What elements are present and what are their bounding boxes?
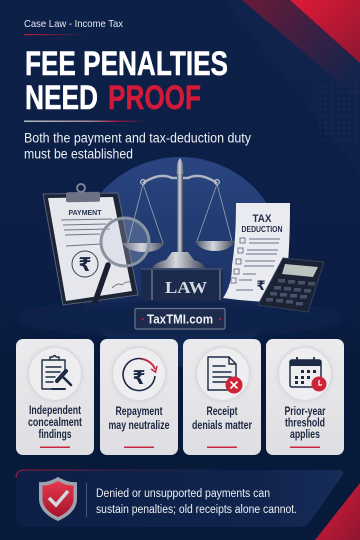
icon: calendar with clock xyxy=(290,357,326,392)
card: receipt denials matter: Receipt xyxy=(206,404,238,418)
card: receipt denials matter xyxy=(183,339,261,455)
icon: document with cross xyxy=(208,357,242,394)
title xyxy=(25,45,228,117)
callout text xyxy=(96,488,297,516)
card: prior-year threshold applies: threshold xyxy=(285,416,325,430)
card: repayment may neutralize: may neutralize xyxy=(108,418,170,432)
calculator xyxy=(258,258,324,312)
scales of justice xyxy=(122,158,235,268)
icon: clipboard and gavel xyxy=(42,356,71,389)
eyebrow label xyxy=(24,18,124,35)
brand badge xyxy=(135,308,225,329)
clipboard with payment sheet xyxy=(43,184,138,305)
card: prior-year threshold applies xyxy=(266,339,344,455)
title: PROOF xyxy=(108,79,201,117)
clipboard with payment sheet: PAYMENT xyxy=(68,208,102,217)
card: independent concealment findings: Independent xyxy=(29,403,81,417)
subtitle xyxy=(24,130,251,162)
tax deduction receipt: ₹ xyxy=(256,279,266,294)
subtitle: must be established xyxy=(24,146,133,162)
card: repayment may neutralize xyxy=(100,339,178,455)
card: prior-year threshold applies: applies xyxy=(290,427,320,441)
subtitle: Both the payment and tax-deduction duty xyxy=(24,130,251,146)
card: receipt denials matter: denials matter xyxy=(192,418,252,432)
callout text: Denied or unsupported payments can xyxy=(96,488,270,500)
card: repayment may neutralize: Repayment xyxy=(116,404,163,418)
law book: LAW xyxy=(165,278,207,297)
title: FEE PENALTIES xyxy=(25,45,228,83)
halo circle xyxy=(75,157,285,367)
icon: shield with check xyxy=(39,477,77,521)
brand badge: TaxTMI.com xyxy=(147,312,213,326)
icon: rupee with arrow: ₹ xyxy=(132,367,146,389)
tax deduction receipt: TAX xyxy=(252,213,272,225)
card: independent concealment findings xyxy=(16,339,94,455)
card: prior-year threshold applies: Prior-year xyxy=(284,404,326,418)
hero illustration xyxy=(15,157,345,367)
magnifying glass xyxy=(95,218,149,302)
red corner top right xyxy=(290,0,360,63)
card: independent concealment findings: concealment xyxy=(28,415,82,429)
tax deduction receipt xyxy=(223,203,290,302)
card: independent concealment findings: findings xyxy=(38,427,72,441)
title: NEED xyxy=(25,79,98,117)
callout panel xyxy=(16,470,343,527)
tax deduction receipt: DEDUCTION xyxy=(242,225,283,234)
title rule xyxy=(24,121,146,122)
ground xyxy=(15,298,345,338)
red corner bottom right xyxy=(315,483,360,540)
callout text: sustain penalties; old receipts alone cannot. xyxy=(96,504,297,516)
clipboard with payment sheet: ₹ xyxy=(78,254,92,276)
law book xyxy=(141,268,223,300)
eyebrow label: Case Law - Income Tax xyxy=(24,18,124,30)
